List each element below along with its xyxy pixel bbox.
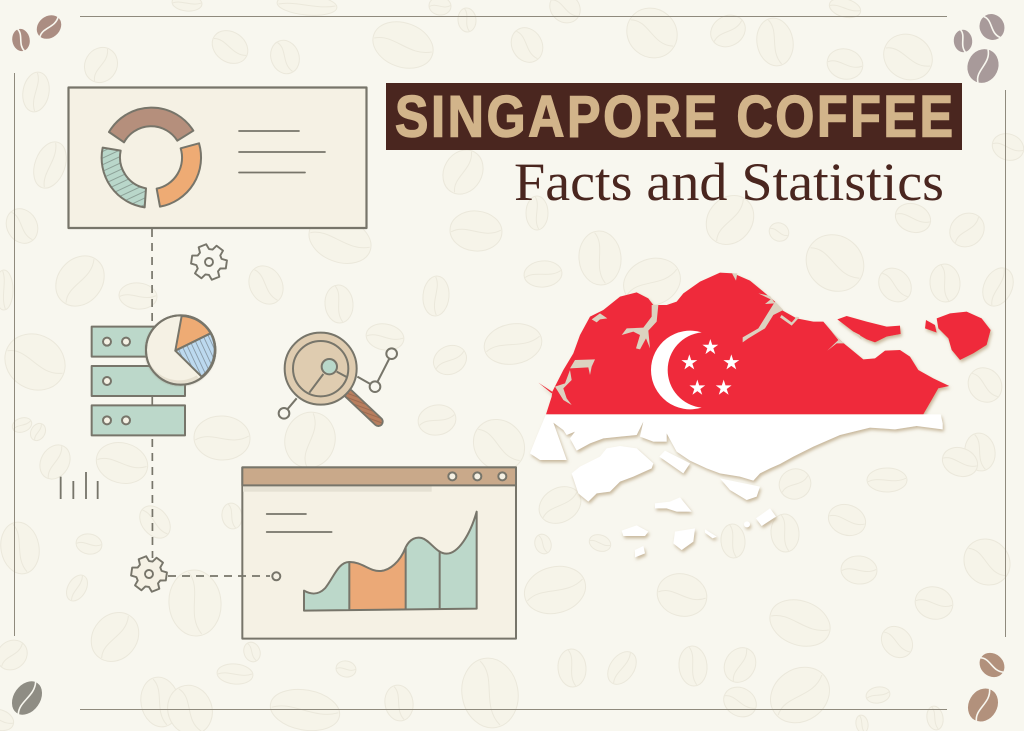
subtitle: Facts and Statistics [514, 152, 944, 212]
title banner: SINGAPORE COFFEE [395, 85, 953, 149]
icon: magnifying glass with data points [279, 333, 397, 422]
flag emblem [651, 331, 739, 409]
server stack with pie chart [92, 315, 215, 435]
donut chart [102, 108, 201, 207]
dashed connector horizontal with end point [168, 572, 280, 580]
corner beans: top left [10, 9, 67, 53]
corner beans: bottom left [5, 674, 49, 722]
dashed connector vertical [151, 229, 154, 558]
map creeks and water inlets [555, 273, 862, 405]
panel: browser window with area chart [242, 467, 516, 639]
icon: gear lower [129, 555, 169, 593]
corner beans: bottom right [961, 647, 1010, 728]
pie chart [146, 315, 215, 385]
text lines [267, 514, 332, 532]
map of Singapore in flag colours [530, 273, 991, 557]
corner beans: top right [952, 8, 1010, 89]
crescent [651, 331, 702, 409]
white lower half [530, 414, 943, 557]
small bars [61, 472, 98, 499]
server rows [92, 327, 185, 435]
text lines [239, 131, 325, 172]
icon: gear upper [189, 243, 229, 281]
area chart [304, 510, 477, 612]
panel: donut chart [68, 88, 366, 228]
stars [681, 339, 739, 395]
red upper half [538, 273, 991, 414]
title bar [242, 467, 516, 492]
